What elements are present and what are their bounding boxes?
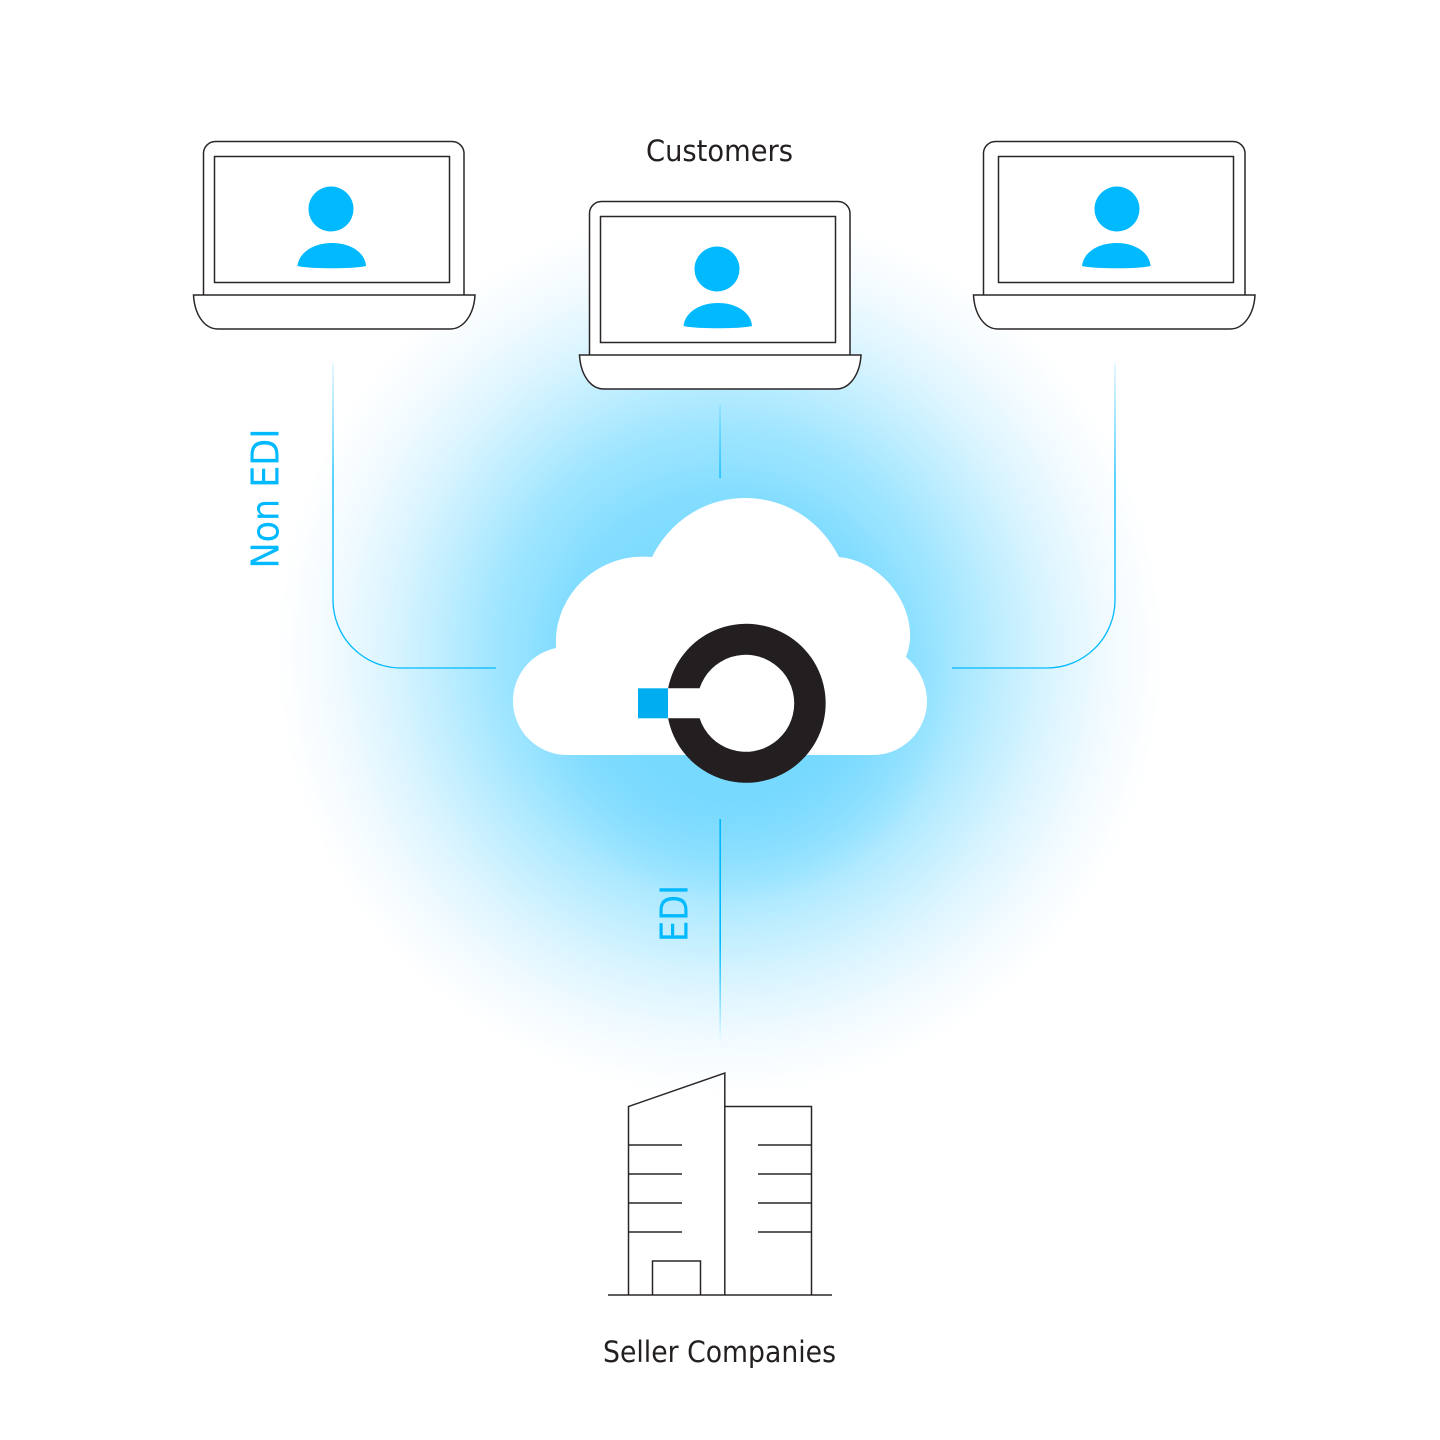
icon: seller building — [608, 1073, 832, 1295]
connector: right laptop to cloud — [952, 363, 1115, 668]
connector: left laptop to cloud — [333, 363, 496, 668]
connector: cloud to seller companies — [719, 819, 721, 1042]
icon: cloud with logo — [513, 498, 927, 783]
icon: right laptop — [974, 142, 1255, 329]
heading: Customers: Customers — [646, 134, 793, 168]
heading: Seller Companies: Seller Companies — [603, 1335, 836, 1369]
connector: middle laptop to cloud — [719, 405, 721, 478]
label: EDI: EDI — [652, 885, 696, 942]
icon: middle laptop — [580, 202, 861, 389]
logo square — [638, 688, 668, 718]
cloud shape — [513, 498, 927, 755]
icon: left laptop — [194, 142, 475, 329]
label: Non EDI: Non EDI — [244, 428, 288, 568]
logo ring — [668, 624, 826, 783]
